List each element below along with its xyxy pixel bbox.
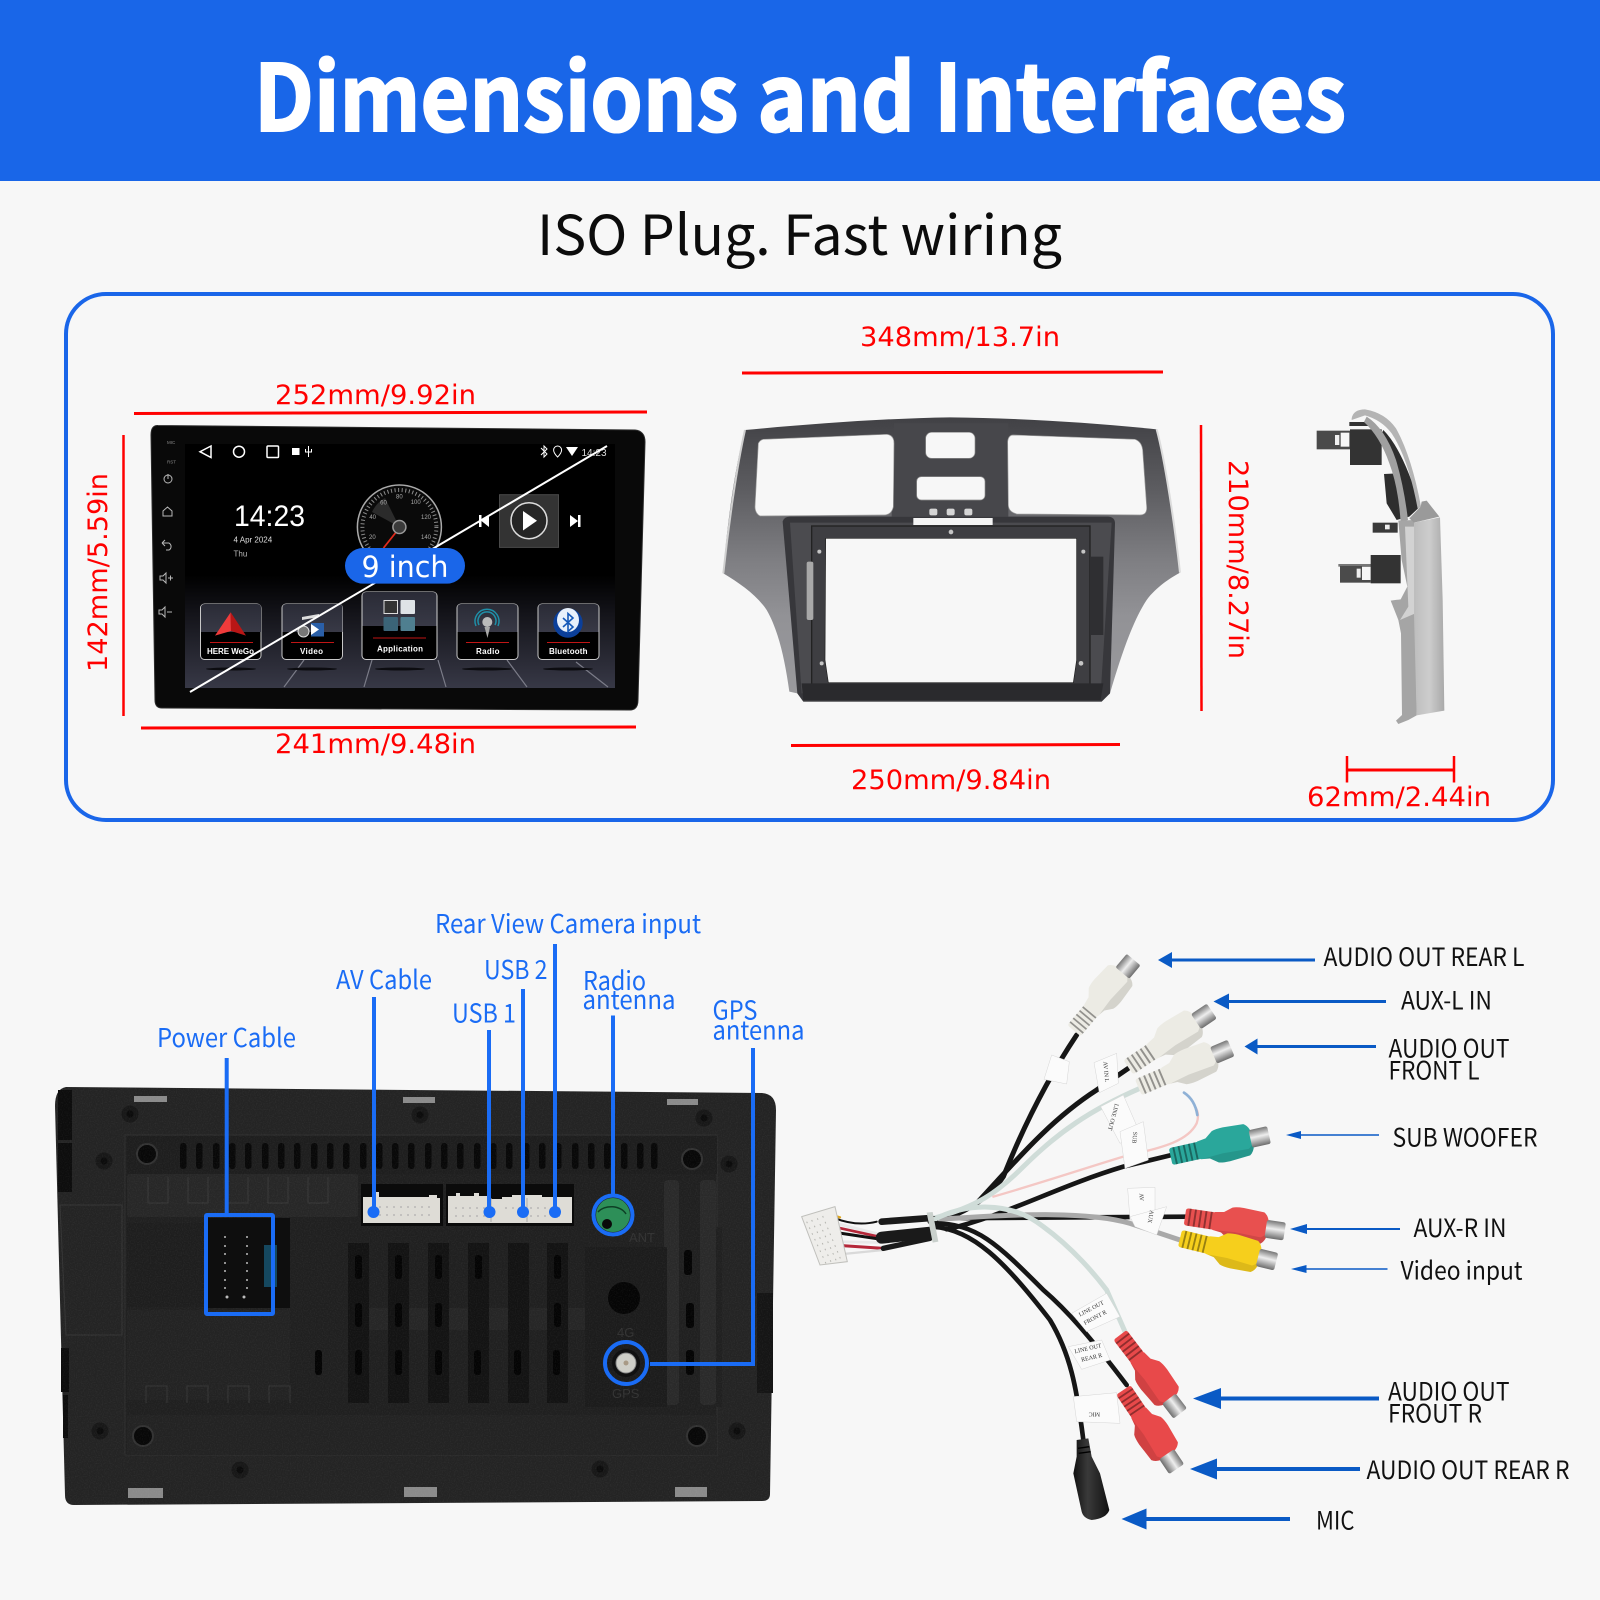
- bezel: [151, 425, 645, 710]
- head unit rear panel: [50, 1085, 780, 1510]
- vent holes: [917, 432, 985, 500]
- callout: power cable: Power Cable: [157, 1018, 296, 1055]
- dimension: 62mm: [1307, 756, 1491, 813]
- app: Radio: Radio: [476, 647, 500, 656]
- speedometer: 60: [380, 500, 387, 506]
- dimension: 252mm top: 252mm/9.92in: [275, 380, 476, 411]
- callout: GPS antenna: [605, 990, 804, 1384]
- center column: [892, 423, 1008, 517]
- panel: dimensions: [66, 294, 1553, 820]
- label: aux R in: AUX-R IN: [1414, 1209, 1506, 1245]
- rear body: [55, 1087, 776, 1505]
- diagonal size line: [190, 446, 607, 692]
- status bar: 14:23: [582, 448, 607, 459]
- left window: [755, 434, 894, 516]
- connector recess: [361, 1184, 574, 1226]
- wire labels: AV IN L: [1101, 1061, 1109, 1083]
- dimension: 142mm side: 142mm/5.59in: [83, 473, 114, 672]
- connector block: [802, 1207, 847, 1265]
- app: Video: Video: [300, 647, 323, 656]
- dimension: 241mm bottom: 241mm/9.48in: [275, 729, 476, 760]
- label: video input: Video input: [1400, 1252, 1523, 1288]
- app: HERE WeGo: [200, 604, 261, 660]
- label: audio out rear L: AUDIO OUT REAR L: [1324, 938, 1524, 974]
- arrow: mic: [1122, 1508, 1290, 1530]
- plug: aux L in: [1119, 997, 1222, 1082]
- callout: radio antenna: antenna: [582, 980, 676, 1017]
- arrow: video input: [1291, 1265, 1388, 1273]
- plug: sub woofer: [1167, 1118, 1273, 1174]
- plug: mic: [1073, 1438, 1109, 1520]
- right window: [1008, 435, 1147, 515]
- side buttons: [159, 440, 176, 617]
- plug: audio out front R: [1107, 1325, 1193, 1424]
- status bar: [200, 446, 607, 459]
- wiring harness: [802, 948, 1287, 1520]
- clock: Thu: [234, 550, 247, 558]
- arrow: audio out rear L: [1158, 952, 1315, 968]
- middle clip: [1373, 523, 1398, 533]
- display: [185, 444, 615, 688]
- vent band: [127, 1136, 717, 1174]
- app: Radio: [457, 604, 518, 660]
- clock: 14:23: [234, 500, 305, 533]
- screws: [133, 1144, 707, 1446]
- speedometer: 80: [396, 494, 403, 500]
- trim frame side view: [1317, 409, 1444, 724]
- label: sub woofer: SUB WOOFER: [1392, 1118, 1538, 1154]
- dark inner mass: [1382, 430, 1420, 520]
- cable tie: [927, 1212, 938, 1243]
- side panel: [1409, 501, 1439, 523]
- curved strip inner: [1364, 417, 1408, 523]
- label: audio out front R: AUDIO OUT: [1388, 1372, 1510, 1408]
- plug: video: [1176, 1221, 1280, 1279]
- arrow: audio out rear R: [1190, 1458, 1360, 1480]
- label: aux L in: AUX-L IN: [1401, 982, 1492, 1018]
- callout: USB 2: USB 2: [484, 950, 548, 987]
- ribbed section: [307, 1180, 722, 1407]
- label: audio out front R: [1388, 1372, 1510, 1430]
- plug: audio out rear L: [1061, 948, 1147, 1042]
- speedometer: 20: [369, 535, 376, 541]
- clock: [234, 500, 305, 558]
- header band: [0, 0, 1600, 181]
- arrow: audio out front L: [1244, 1038, 1376, 1054]
- app: Application: Application: [377, 644, 423, 654]
- wire labels: SUB: [1130, 1131, 1137, 1144]
- upper clip: [1317, 422, 1382, 465]
- clock: 4 Apr 2024: [234, 536, 273, 544]
- media controls: [479, 495, 580, 547]
- wires: [832, 1035, 1198, 1440]
- dimension: 62mm: 62mm/2.44in: [1307, 782, 1491, 813]
- dimension: 210mm: 210mm/8.27in: [1222, 460, 1253, 659]
- plug: audio out front L: [1132, 1032, 1238, 1103]
- curved strip outer: [1352, 409, 1421, 509]
- callout: rear view camera: [435, 904, 701, 1218]
- speedometer: 100: [411, 500, 421, 506]
- lower clip: [1338, 555, 1401, 583]
- subtitle: ISO Plug. Fast wiring: [537, 191, 1062, 271]
- side buttons: MIC: [167, 440, 176, 445]
- arrow: audio out front R: [1193, 1388, 1379, 1409]
- callout: radio antenna: Radio: [583, 961, 646, 998]
- USB connectors: [448, 1193, 572, 1223]
- arrow: aux L in: [1214, 994, 1386, 1010]
- label: audio out front L: FRONT L: [1388, 1052, 1480, 1088]
- callout: AV cable: AV Cable: [336, 960, 432, 997]
- callout: USB 1: [452, 994, 516, 1218]
- wire labels: LINE OUT: [1106, 1103, 1119, 1131]
- callout: GPS antenna: GPS: [712, 990, 758, 1028]
- speedometer: [357, 485, 441, 569]
- speedometer: 140: [421, 535, 432, 541]
- wire labels: LINE OUT: [1078, 1300, 1105, 1318]
- dimension: 250mm: 250mm/9.84in: [851, 765, 1051, 796]
- upper left plate: [127, 1174, 358, 1217]
- surface texture: [50, 1085, 780, 1510]
- mounting holes: [94, 1108, 743, 1476]
- antenna bay: [585, 1230, 667, 1407]
- title: Dimensions and Interfaces: [254, 25, 1346, 158]
- callout: AV cable: [336, 960, 432, 1218]
- metal tabs: [128, 1096, 707, 1498]
- side cutouts: [58, 1090, 773, 1438]
- antenna bay: GPS: [612, 1386, 640, 1401]
- buttons: [929, 509, 972, 515]
- power connector: [205, 1218, 290, 1308]
- radio antenna port: [596, 1198, 630, 1232]
- callout: GPS antenna: antenna: [712, 1010, 804, 1048]
- label: audio out front R: FROUT R: [1388, 1394, 1482, 1430]
- frame body: [723, 417, 1180, 702]
- arrow: sub woofer: [1286, 1131, 1379, 1139]
- lower left plate: [127, 1310, 290, 1403]
- callout: radio antenna: [582, 961, 676, 1234]
- antenna bay: ANT: [629, 1230, 655, 1245]
- app: Bluetooth: Bluetooth: [549, 647, 588, 656]
- app: Application: [362, 592, 437, 660]
- speedometer: 40: [369, 515, 377, 521]
- label: mic: MIC: [1316, 1502, 1355, 1538]
- screen bay: [783, 517, 1115, 702]
- app: Video: [282, 604, 342, 660]
- label: audio out front L: [1388, 1030, 1510, 1088]
- wire labels: AV: [1137, 1193, 1144, 1202]
- callout: power cable: [157, 1018, 296, 1314]
- inner raised frame: [125, 1135, 717, 1455]
- AV connector: [363, 1192, 440, 1223]
- label: audio out rear R: AUDIO OUT REAR R: [1366, 1451, 1570, 1487]
- wire labels: AUX: [1146, 1210, 1154, 1224]
- speedometer: 120: [421, 515, 432, 521]
- wire labels: REAR R: [1081, 1353, 1103, 1364]
- badge: 9 inch: [345, 548, 465, 584]
- dimension: 348mm: 348mm/13.7in: [860, 322, 1060, 353]
- head unit screen: [151, 425, 645, 710]
- label: audio out front L: AUDIO OUT: [1388, 1030, 1510, 1066]
- trim frame front view: [723, 417, 1180, 702]
- plug: audio out rear R: [1109, 1380, 1191, 1479]
- callout: rear view camera: Rear View Camera input: [435, 904, 701, 941]
- badge: 9 inch: 9 inch: [362, 550, 448, 584]
- wire labels: [1044, 1053, 1167, 1423]
- antenna bay: 4G: [617, 1325, 634, 1340]
- wire labels: MIC: [1089, 1411, 1100, 1417]
- callout: USB 1: USB 1: [452, 994, 516, 1030]
- wire labels: FRONT R: [1083, 1310, 1108, 1327]
- bottom bar: [127, 1415, 717, 1455]
- callout: USB 2: [484, 950, 548, 1218]
- side buttons: RST: [167, 460, 176, 464]
- plug: aux R in: [1182, 1200, 1287, 1249]
- GPS antenna port: [612, 1349, 640, 1377]
- app: HERE WeGo: HERE WeGo: [207, 647, 254, 656]
- arrow: aux R in: [1290, 1224, 1400, 1234]
- wire labels: LINE OUT: [1074, 1343, 1103, 1355]
- app: Bluetooth: [538, 604, 599, 660]
